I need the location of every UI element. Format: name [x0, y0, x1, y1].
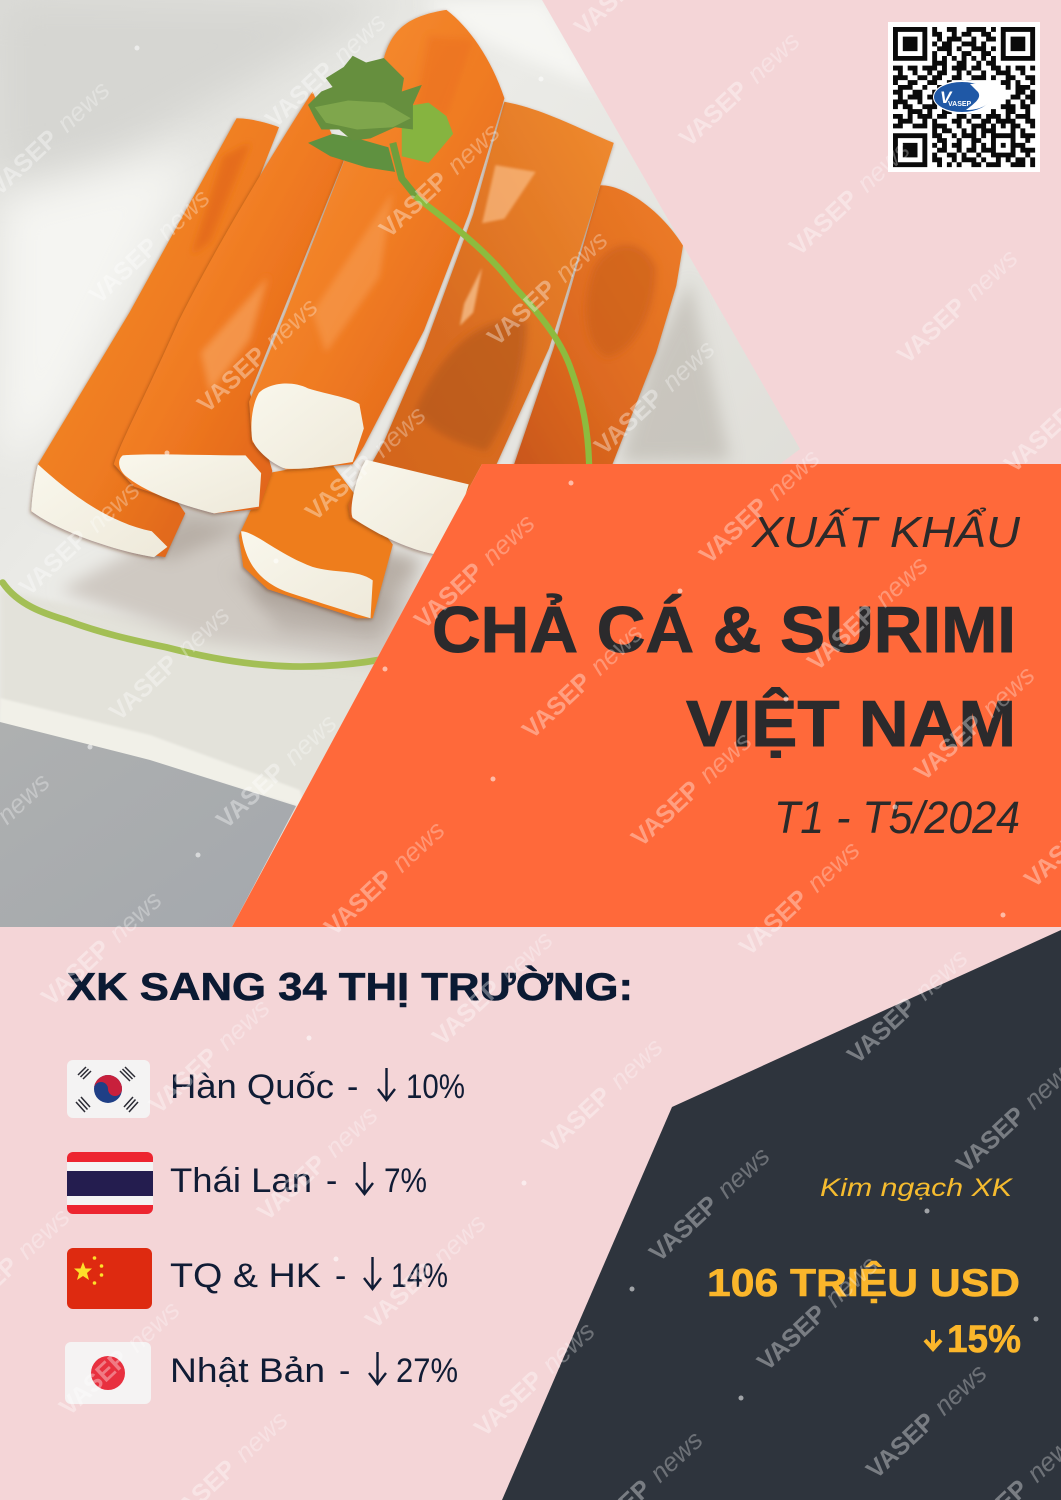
watermarks: VASEP news: VASEPnews — [408, 508, 540, 634]
watermarks: VASEP news: VASEPnews — [751, 1250, 883, 1376]
QR code — [888, 22, 1040, 172]
watermarks: VASEP news: VASEPnews — [733, 835, 865, 961]
market row: Thailand — [67, 1152, 427, 1214]
watermarks: VASEP news: VASEPnews — [841, 943, 973, 1069]
watermarks: VASEP news: VASEPnews — [13, 475, 145, 601]
icon: down arrow — [364, 1257, 381, 1289]
icon: down arrow — [356, 1162, 373, 1194]
icon: down arrow — [925, 1330, 941, 1349]
market row: South Korea — [67, 1060, 465, 1118]
watermarks: VASEP news: VASEPnews — [191, 292, 323, 418]
watermarks: VASEP news: VASEPnews — [801, 550, 933, 676]
value: 7%: 7% — [384, 1162, 427, 1200]
crab sticks traced in enlarged coordinates — [3, 10, 683, 667]
watermarks: VASEP news: VASEPnews — [536, 1032, 668, 1158]
flag: China — [67, 1248, 152, 1309]
watermarks: VASEP news: VASEPnews — [210, 708, 342, 834]
icon: VASEP logo: V — [940, 88, 953, 107]
watermarks: VASEP news: VASEPnews — [83, 183, 215, 309]
stick A, leftmost — [31, 118, 279, 557]
value: 106 million USD: 106 TRIỆU USD — [707, 1261, 1020, 1305]
watermarks: VASEP news: VASEPnews — [426, 925, 558, 1051]
watermarks: VASEP news: VASEPnews — [481, 225, 613, 351]
label: Thái Lan: Thái Lan — [170, 1162, 312, 1200]
stick D, right of centre — [348, 102, 614, 556]
watermarks: VASEP news: VASEPnews — [643, 1141, 775, 1267]
stick C, top centre — [249, 10, 504, 470]
watermarks: VASEP news: VASEPnews — [35, 885, 167, 1011]
watermarks: VASEP news: VASEPnews — [860, 1358, 992, 1484]
watermarks: VASEP news: VASEPnews — [318, 815, 450, 941]
watermarks: VASEP news: VASEPnews — [588, 334, 720, 460]
watermarks: VASEP news: VASEPnews — [259, 7, 391, 133]
value: down 15%: 15% — [947, 1318, 1021, 1361]
watermarks: VASEP news: VASEPnews — [908, 660, 1040, 786]
watermarks: VASEP news: VASEPnews — [783, 135, 915, 261]
watermarks: VASEP news: VASEPnews — [673, 26, 805, 152]
watermarks: VASEP news: VASEPnews — [625, 726, 757, 852]
market row: Japan — [65, 1342, 458, 1404]
stick shadows — [154, 503, 420, 624]
heading: 34 markets: XK SANG 34 THỊ TRƯỜNG: — [67, 965, 633, 1009]
watermarks: VASEP news: VASEPnews — [891, 243, 1023, 369]
icon: down arrow — [369, 1352, 386, 1384]
watermarks: VASEP news: VASEPnews — [103, 600, 235, 726]
icon: VASEP logo: VASEP — [948, 101, 972, 108]
value: 27%: 27% — [396, 1352, 458, 1390]
title line: period: T1 - T5/2024 — [774, 792, 1020, 843]
watermarks: VASEP news: VASEPnews — [53, 1295, 185, 1421]
market row: China & Hong Kong: - — [335, 1257, 346, 1295]
market row: China & Hong Kong — [67, 1248, 448, 1309]
value: 10%: 10% — [406, 1068, 465, 1106]
watermarks: VASEP news: VASEPnews — [516, 618, 648, 744]
watermarks: VASEP news: VASEPnews — [359, 1208, 491, 1334]
watermarks: VASEP news: VASEPnews — [299, 400, 431, 526]
bottom stem — [3, 583, 379, 667]
curved stem — [415, 196, 589, 469]
label: TQ & HK: TQ & HK — [170, 1257, 321, 1295]
label: export turnover: Kim ngạch XK — [820, 1174, 1014, 1202]
title line: Chả cá & Surimi: CHẢ CÁ & SURIMI — [432, 593, 1016, 666]
coriander leaves — [308, 56, 453, 196]
orange title panel — [232, 464, 1061, 927]
title block — [432, 506, 1020, 843]
watermarks: VASEP news: VASEPnews — [251, 1100, 383, 1226]
stick E, far right — [513, 185, 683, 466]
title line: Xuất khẩu: XUẤT KHẨU — [751, 506, 1020, 557]
market row: Thailand: - — [326, 1162, 337, 1200]
icon: VASEP logo — [933, 80, 997, 114]
watermarks: VASEP news: VASEPnews — [143, 993, 275, 1119]
dark revenue panel — [502, 930, 1061, 1500]
label: Hàn Quốc: Hàn Quốc — [170, 1068, 334, 1106]
plate lower surface and rim — [1, 593, 213, 732]
label: Nhật Bản: Nhật Bản — [170, 1352, 325, 1390]
flag: Japan — [65, 1342, 151, 1404]
title line: Việt Nam: VIỆT NAM — [686, 687, 1016, 760]
revenue figures — [707, 1174, 1021, 1361]
flag: Thailand — [67, 1152, 153, 1214]
watermarks: VASEP news: VASEPnews — [468, 1316, 600, 1442]
icon: down arrow — [378, 1068, 395, 1100]
market row: South Korea: - — [347, 1068, 358, 1106]
photo: crab sticks on plate — [0, 0, 820, 930]
flag: South Korea — [67, 1060, 150, 1118]
market row: Japan: - — [339, 1352, 350, 1390]
watermarks: VASEP news: VASEPnews — [693, 443, 825, 569]
stick F, lower — [239, 462, 393, 618]
watermarks: VASEP news: VASEPnews — [373, 117, 505, 243]
stick B, second — [114, 92, 344, 513]
value: 14%: 14% — [391, 1257, 448, 1295]
